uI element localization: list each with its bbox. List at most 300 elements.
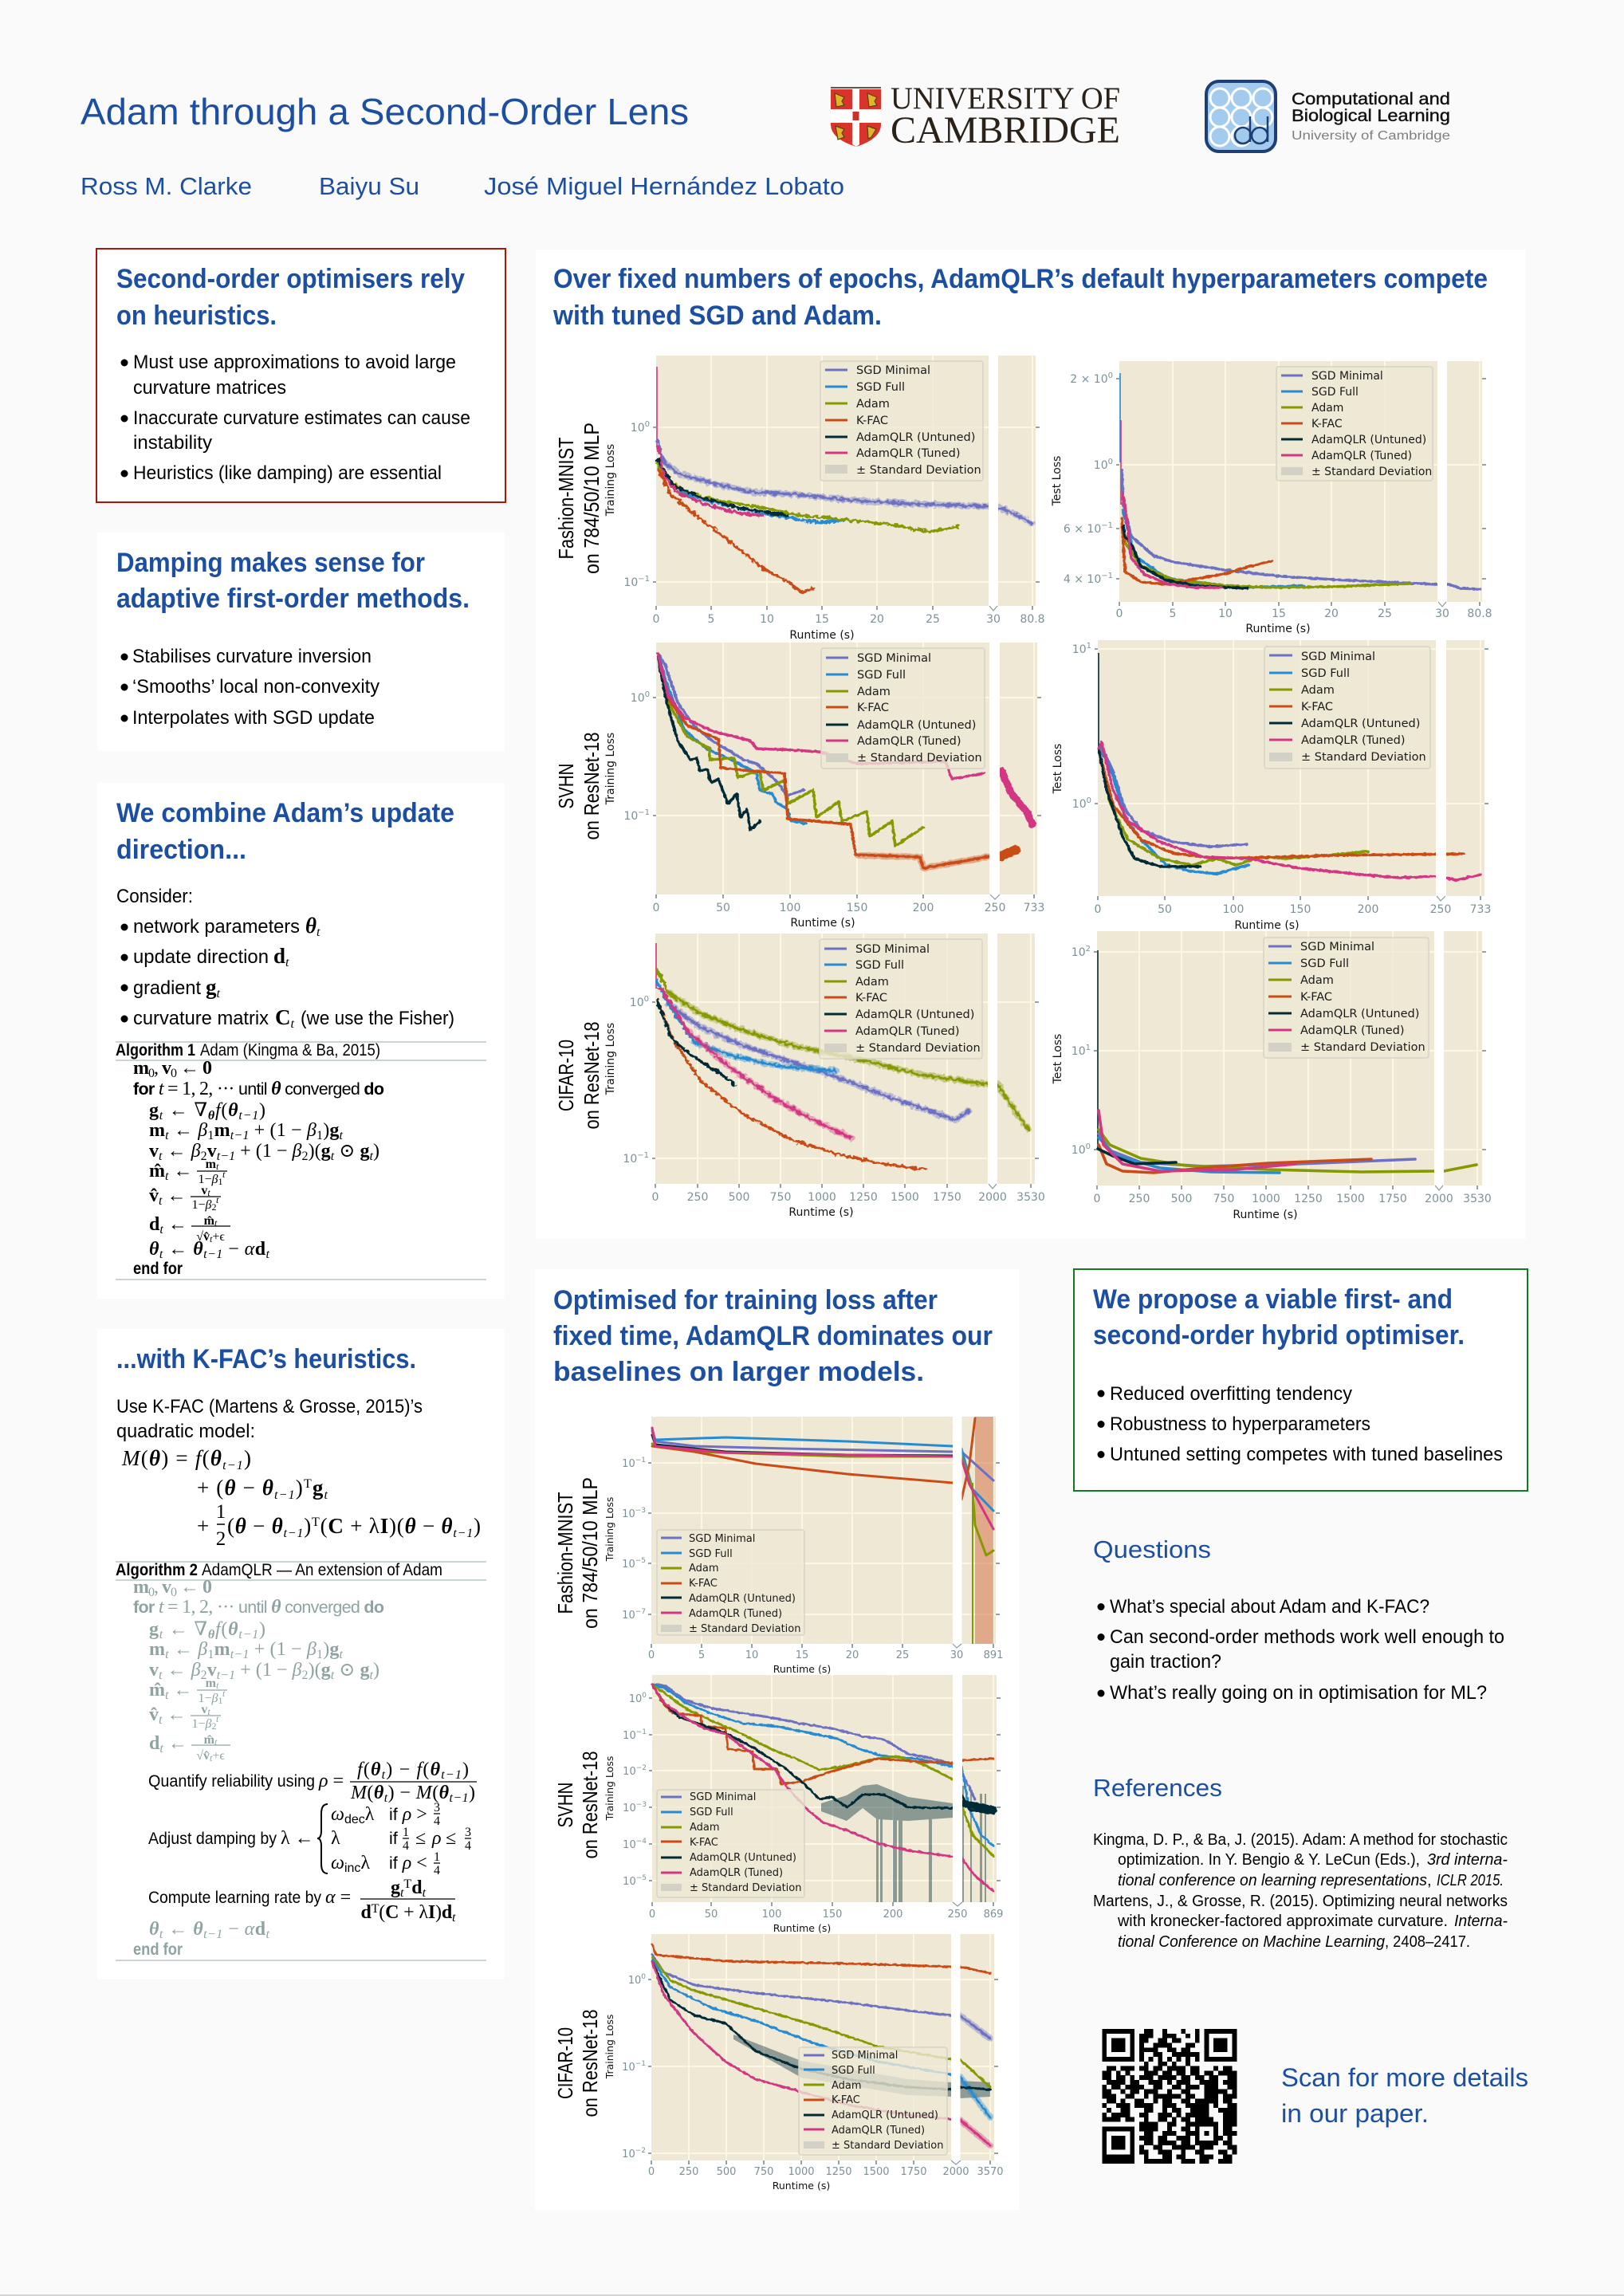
algorithm 1: Adam: m [149,1120,165,1141]
algorithm 1: Adam: t−1 [238,1109,258,1122]
axis labels: 0 [1095,903,1101,916]
panel: K-FAC heuristics [97,1329,505,1980]
quadratic model equation: ) [296,1476,303,1500]
greyed Adam steps: g [329,1639,339,1660]
quadratic model equation: t [324,1488,328,1502]
algorithm 1: Adam: ← [162,1185,186,1206]
legend: SGD Minimal [689,1533,755,1545]
reference list: 3rd interna- [1427,1851,1508,1869]
quadratic model equation: ) [304,1514,311,1538]
legend: AdamQLR (Untuned) [1300,1008,1419,1020]
algorithm 1: Adam: (θ [221,1100,238,1121]
axis labels: 0 [653,902,659,914]
learning rate step: d [360,1902,372,1923]
algorithm 1: Adam: − [223,1239,244,1260]
axis labels: 3530 [1016,1191,1045,1204]
title: Adam through a Second-Order Lens [81,91,689,132]
axis labels: 1000 [1252,1193,1280,1205]
algorithm 1: Adam: 1 [207,1129,214,1142]
axis labels: 10 [623,810,638,823]
algorithm 1: Adam: √v̂ [196,1230,210,1244]
legend: K-FAC [857,702,889,714]
row label: SVHN: on ResNet-18 [580,732,604,840]
greyed Adam steps: √v̂ [196,1749,210,1763]
reliability step: t [382,1768,386,1782]
algorithm 1: Adam: ← [176,1058,203,1079]
reliability step: ρ = [318,1771,344,1791]
legend: AdamQLR (Untuned) [689,1593,796,1605]
greyed Adam steps: v̂ [149,1704,159,1725]
axis labels: Runtime (s) [773,2180,830,2192]
reliability step: ) [462,1759,469,1780]
consider list: t [290,1017,295,1031]
quadratic model equation: t−1 [274,1488,295,1502]
axis labels: 15 [796,1649,808,1661]
chart: SVHN training loss, fixed time [604,1675,1003,1934]
algorithm 1: Adam: d [149,1214,160,1235]
algorithm 1: Adam: 1 [218,1176,223,1187]
quadratic model equation: ) [474,1514,481,1538]
axis labels: Training Loss [604,1023,617,1095]
heading: Second-order optimisers rely [116,264,465,294]
bullet list: gain traction? [1110,1651,1221,1673]
axis labels: 10 [1072,1045,1086,1058]
algorithm 2: AdamQLR [116,1560,486,1960]
algorithm 1: Adam: 2 [302,1150,309,1163]
greyed Adam steps: ) [323,1639,329,1660]
chart: Fashion-MNIST training loss, fixed time [604,1417,1003,1675]
greyed Adam steps: d [149,1733,160,1754]
algorithm 2: AdamQLR: AdamQLR — An extension of Adam [202,1560,442,1579]
algorithm 1: Adam: t [165,1129,169,1142]
damping step: 1 [434,1850,440,1864]
algorithm 1: Adam: Adam (Kingma & Ba, 2015) [200,1040,380,1060]
axis labels: Runtime (s) [790,917,855,930]
algorithm 1: Adam: v [201,1184,207,1197]
axis labels: 100 [762,1909,781,1921]
axis labels: Runtime (s) [1234,919,1300,932]
axis labels: 50 [716,902,730,914]
axis labels: 891 [984,1649,1003,1661]
bullet list: Untuned setting competes with tuned baselines [1110,1444,1503,1465]
axis labels: 30 [950,1649,963,1661]
algorithm 1: Adam: β [292,1141,302,1162]
axis labels: 733 [1470,903,1491,916]
reference list: Kingma, D. P., & Ba, J. (2015). Adam: A method for stochastic [1093,1831,1508,1849]
consider list: curvature matrix [133,1008,269,1029]
intro text [116,1396,423,1442]
algorithm 1: Adam: end for [133,1259,183,1278]
greyed Adam steps: θ [193,1919,203,1940]
greyed Adam steps: v [207,1660,217,1681]
quadratic model equation: t−1 [284,1527,303,1540]
algorithm 1: Adam: t [222,1169,226,1180]
bullet list [121,646,379,729]
legend: K-FAC [689,1578,718,1590]
algorithm 1: Adam: ) [323,1120,329,1141]
algorithm 1: Adam: g [360,1141,369,1162]
legend: AdamQLR (Untuned) [856,431,975,444]
axis labels: 2000 [1425,1193,1453,1205]
heading: fixed time, AdamQLR dominates our [553,1321,993,1351]
authors: Baiyu Su [319,172,419,200]
reference list: tional Conference on Machine Learning [1118,1933,1385,1951]
reliability step: t−1 [450,1791,469,1805]
axis labels: 10 [622,1458,635,1470]
legend: AdamQLR (Tuned) [1300,1024,1405,1037]
logo: Computational and Biological Learning: Computational and [1292,90,1450,108]
greyed Adam steps: ← [163,1919,193,1940]
greyed Adam steps: v [201,1703,207,1716]
learning rate step: t [423,1886,427,1900]
logo: University of Cambridge: UNIVERSITY OF [891,81,1120,116]
legend: AdamQLR (Untuned) [855,1008,974,1021]
legend: ± Standard Deviation [1300,1041,1425,1054]
heading [1093,1284,1465,1350]
damping step: λ ← [281,1828,314,1849]
greyed Adam steps: 1 [207,1648,214,1661]
algorithm 1: Adam: g [329,1120,339,1141]
algorithm 1: Adam: ⊙ [334,1141,360,1162]
axis labels: 5 [708,613,714,626]
QR code [1102,2031,1237,2161]
damping step: if ρ < [389,1853,427,1873]
logo: University of Cambridge [831,81,1120,151]
greyed Adam steps: f [215,1619,223,1640]
algorithm 1: Adam: 1−β [191,1198,212,1212]
algorithm 1: Adam: t [210,1233,213,1244]
consider list: C [275,1005,290,1029]
learning rate step: Compute learning rate by [148,1888,321,1907]
chart: SVHN test loss [1052,640,1491,932]
legend [657,1790,804,1897]
heading [552,264,1488,331]
axis labels: 10 [623,1839,636,1851]
axis labels: 50 [705,1909,718,1921]
damping step: 3 [434,1801,440,1814]
bullet list: Heuristics (like damping) are essential [133,462,442,484]
algorithm 1: Adam: β [306,1120,317,1141]
algorithm 2: AdamQLR: Algorithm 2 [116,1560,198,1579]
axis labels: 10 [623,1803,636,1814]
greyed Adam steps: m̂ [204,1733,215,1747]
bullet list: ‘Smooths’ local non-convexity [132,676,379,698]
axis labels: −4 [636,1838,647,1846]
damping step: 4 [434,1864,440,1877]
axis labels: 10 [623,1766,636,1778]
algorithm 1: Adam: t [159,1248,163,1261]
heading [116,264,465,331]
chart: Fashion-MNIST test loss [1051,361,1492,635]
algorithm 1: Adam: v [207,1141,217,1162]
algorithm 1: Adam: t [159,1223,163,1236]
greyed Adam steps: t [159,1742,163,1755]
bullet list [1097,1596,1504,1704]
algorithm 1: Adam: t [159,1150,163,1163]
axis labels: 500 [717,2166,736,2178]
damping step: 3 [465,1826,471,1839]
panel: viable hybrid optimiser [1074,1269,1528,1491]
heading [116,548,470,614]
algorithm 1: Adam: t [370,1150,374,1163]
axis labels: 25 [926,613,940,626]
row label: CIFAR-10: CIFAR-10 [554,1040,578,1111]
greyed Adam steps: 0 [203,1577,212,1598]
legend [821,648,985,769]
legend: Adam [690,1822,720,1834]
greyed Adam steps: ) [259,1619,265,1640]
greyed Adam steps: t [159,1628,163,1641]
consider list: network parameters [133,916,300,938]
axis labels: 10 [623,1153,637,1166]
axis labels: 0 [1108,458,1113,466]
axis labels: 200 [883,1909,902,1921]
learning rate step: T [372,1902,379,1916]
greyed Adam steps: t [340,1648,344,1661]
axis labels: 0 [645,420,650,429]
axis labels: 250 [1129,1193,1150,1205]
damping step [148,1801,471,1877]
legend: SGD Minimal [1311,370,1383,383]
axis labels: −1 [1101,572,1113,580]
chart: CIFAR-10 test loss [1052,931,1492,1221]
greyed Adam steps: t−1 [238,1628,258,1641]
axis labels: 2 [1086,945,1091,953]
greyed Adam steps: t−1 [203,1928,222,1941]
axis labels: 0 [648,2166,655,2178]
axis labels: 1 [1087,642,1091,651]
heading: References [1093,1774,1222,1802]
axis labels: 25 [896,1649,909,1661]
quadratic model equation: T [312,1516,320,1529]
damping step: ω [331,1804,344,1825]
panel: fixed-time plots [535,1269,1019,2210]
axis labels: Runtime (s) [789,629,855,642]
algorithm 1: Adam: t [331,1150,335,1163]
greyed Adam steps: m [133,1577,149,1598]
legend: AdamQLR (Tuned) [1301,734,1406,747]
reference list: , 2408–2417. [1385,1933,1470,1951]
algorithm 1: Adam: f [215,1100,223,1121]
axis labels: 25 [1378,607,1392,620]
axis labels: 2 × 10 [1070,373,1108,386]
legend: SGD Minimal [1300,941,1374,953]
algorithm 1: Adam: )( [309,1141,321,1162]
algorithm 1: Adam: t [266,1248,270,1261]
greyed Adam steps: t [210,1752,213,1763]
axis labels: Test Loss [1052,744,1064,794]
legend: AdamQLR (Tuned) [1311,450,1412,462]
axis labels: 250 [1430,903,1451,916]
axis labels: 500 [729,1191,749,1204]
consider list [116,886,454,1031]
row label: CIFAR-10: on ResNet-18 [580,1022,604,1129]
damping step: Adjust damping by [148,1829,277,1848]
logo: Computational and Biological Learning: Biological Learning [1292,107,1450,125]
algorithm 1: Adam: 2 [212,1201,217,1213]
bullet list: instability [133,432,212,454]
axis labels: 1750 [900,2166,927,2178]
row label: Fashion-MNIST: on 784/50/10 MLP [580,423,604,574]
intro text: Use K-FAC (Martens & Grosse, 2015)’s [116,1396,423,1417]
row label: SVHN: SVHN [553,1783,577,1827]
legend: SGD Full [1300,957,1349,970]
axis labels: 869 [984,1909,1003,1921]
axis labels: 1500 [891,1191,919,1204]
heading: We propose a viable first- and [1093,1284,1453,1315]
consider list: t [317,926,320,939]
axis labels: 0 [1087,796,1091,805]
greyed Adam steps: ← [176,1577,203,1598]
legend: SGD Full [1311,386,1359,399]
greyed Adam steps: ← [168,1680,192,1700]
algorithm 1: Adam: t [159,1109,163,1122]
bullet list: Must use approximations to avoid large [133,352,456,373]
learning rate step: α = [325,1887,351,1908]
damping step: ρ [431,1828,442,1849]
axis labels: 1500 [1336,1193,1365,1205]
legend: AdamQLR (Untuned) [832,2109,938,2121]
axis labels: 20 [870,613,884,626]
greyed Adam steps: end for [133,1940,183,1959]
chart: CIFAR-10 training loss, fixed time [604,1934,1004,2192]
greyed Adam steps: t [266,1928,270,1941]
reliability step: ) − [386,1759,415,1780]
axis labels: 2000 [978,1191,1007,1204]
legend: AdamQLR (Tuned) [689,1608,782,1620]
axis labels: 1500 [863,2166,890,2178]
axis labels [1052,945,1492,1221]
axis labels: 3570 [977,2166,1004,2178]
quadratic model equation: g [313,1476,324,1500]
legend: ± Standard Deviation [689,1623,800,1635]
row label: CIFAR-10: CIFAR-10 [553,2027,577,2099]
algorithm 1: Adam: v̂ [149,1185,159,1206]
greyed Adam steps: ⊙ [334,1660,360,1681]
damping step: λ [331,1828,340,1849]
bullet list: Reduced overfitting tendency [1110,1383,1352,1405]
axis labels: 10 [631,422,645,434]
greyed Adam steps: for t = 1, 2, ··· until θ converged do [133,1597,384,1618]
axis labels: 750 [1213,1193,1234,1205]
algorithm 1: Adam: ← ∇ [163,1100,207,1121]
row label: CIFAR-10: on ResNet-18 [578,2009,602,2117]
heading [116,798,454,865]
legend: ± Standard Deviation [857,752,982,765]
greyed Adam steps: , [154,1577,163,1598]
bullet list: Robustness to hyperparameters [1110,1413,1370,1435]
algorithm 1: Adam: ) [373,1141,379,1162]
axis labels [1051,372,1492,635]
axis labels: Test Loss [1051,456,1064,506]
heading: ...with K-FAC’s heuristics. [116,1344,416,1374]
axis labels: 15 [1272,607,1286,620]
axis labels: 10 [1072,946,1086,959]
axis labels: 250 [687,1191,708,1204]
reliability step: f(θ [417,1759,440,1780]
quadratic model equation: 1 [216,1501,226,1523]
row label: CIFAR-10 [553,2009,602,2117]
axis labels: 0 [1086,1142,1091,1151]
axis labels: −3 [636,1801,647,1809]
row label: SVHN [553,1751,602,1859]
axis labels: 10 [760,613,774,626]
greyed Adam steps: t [331,1669,335,1682]
legend: SGD Full [832,2065,875,2077]
axis labels: 10 [1072,1144,1086,1157]
axis labels: Runtime (s) [1245,623,1311,635]
algorithm 1: Adam: t [216,1161,219,1172]
axis labels: −1 [635,1457,646,1464]
algorithm 1: Adam: 1−β [198,1173,218,1186]
legend: ± Standard Deviation [856,464,981,477]
axis labels: 10 [1072,643,1087,656]
legend: AdamQLR (Tuned) [832,2125,925,2137]
algorithm 1: Adam: t−1 [217,1150,235,1163]
paper call to action: Scan for more details [1281,2063,1528,2092]
legend [1276,367,1433,481]
legend: AdamQLR (Untuned) [857,719,976,732]
greyed Adam steps: t [165,1648,169,1661]
axis labels: −1 [635,2060,646,2068]
damping step: if ρ > [389,1804,427,1825]
greyed Adam steps: + (1 − [249,1639,307,1660]
legend: SGD Full [689,1548,733,1560]
greyed Adam steps: m [206,1677,217,1690]
axis labels: Training Loss [604,733,617,805]
axis labels: 10 [622,1610,635,1622]
legend: Adam [689,1563,719,1575]
quadratic model equation: ( [320,1514,328,1538]
legend: Adam [1300,974,1334,987]
chart: Fashion-MNIST training loss [604,356,1045,642]
legend [820,939,982,1059]
quadratic model equation: + (θ − θ [197,1476,273,1500]
reliability step: f(θ [357,1759,380,1780]
greyed Adam steps: t [216,1680,219,1691]
greyed Adam steps: m [149,1639,165,1660]
axis labels: Runtime (s) [773,1663,831,1675]
axis labels: 10 [622,2149,635,2160]
legend: SGD Full [1301,667,1350,680]
greyed Adam steps: αd [245,1919,265,1940]
legend: ± Standard Deviation [832,2140,943,2152]
row label: Fashion-MNIST [554,423,604,574]
bullet list: What’s special about Adam and K-FAC? [1110,1596,1429,1618]
learning rate step: g [391,1877,400,1898]
algorithm 1: Adam: t [216,1194,219,1205]
paper call to action: in our paper. [1281,2099,1429,2128]
reliability step: Quantify reliability using [148,1771,315,1791]
axis labels: 10 [630,997,644,1009]
legend [820,361,983,481]
axis labels: 1250 [1294,1193,1323,1205]
axis labels: Training Loss [604,1756,615,1821]
axis labels: −1 [637,1151,649,1160]
reference list: ICLR 2015. [1437,1872,1504,1889]
greyed Adam steps: θ [208,1628,215,1641]
reliability step [148,1759,477,1805]
legend: SGD Minimal [856,364,930,377]
axis labels [604,420,1045,642]
algorithm 1: Adam: for t = 1, 2, ··· until θ converged do [133,1079,384,1099]
axis labels: 1250 [825,2166,852,2178]
panel: combine Adam's update direction [97,783,505,1299]
greyed Adam steps: β [306,1639,317,1660]
axis labels: Runtime (s) [788,1206,854,1219]
legend: AdamQLR (Tuned) [856,447,961,460]
axis labels: 100 [1223,903,1244,916]
